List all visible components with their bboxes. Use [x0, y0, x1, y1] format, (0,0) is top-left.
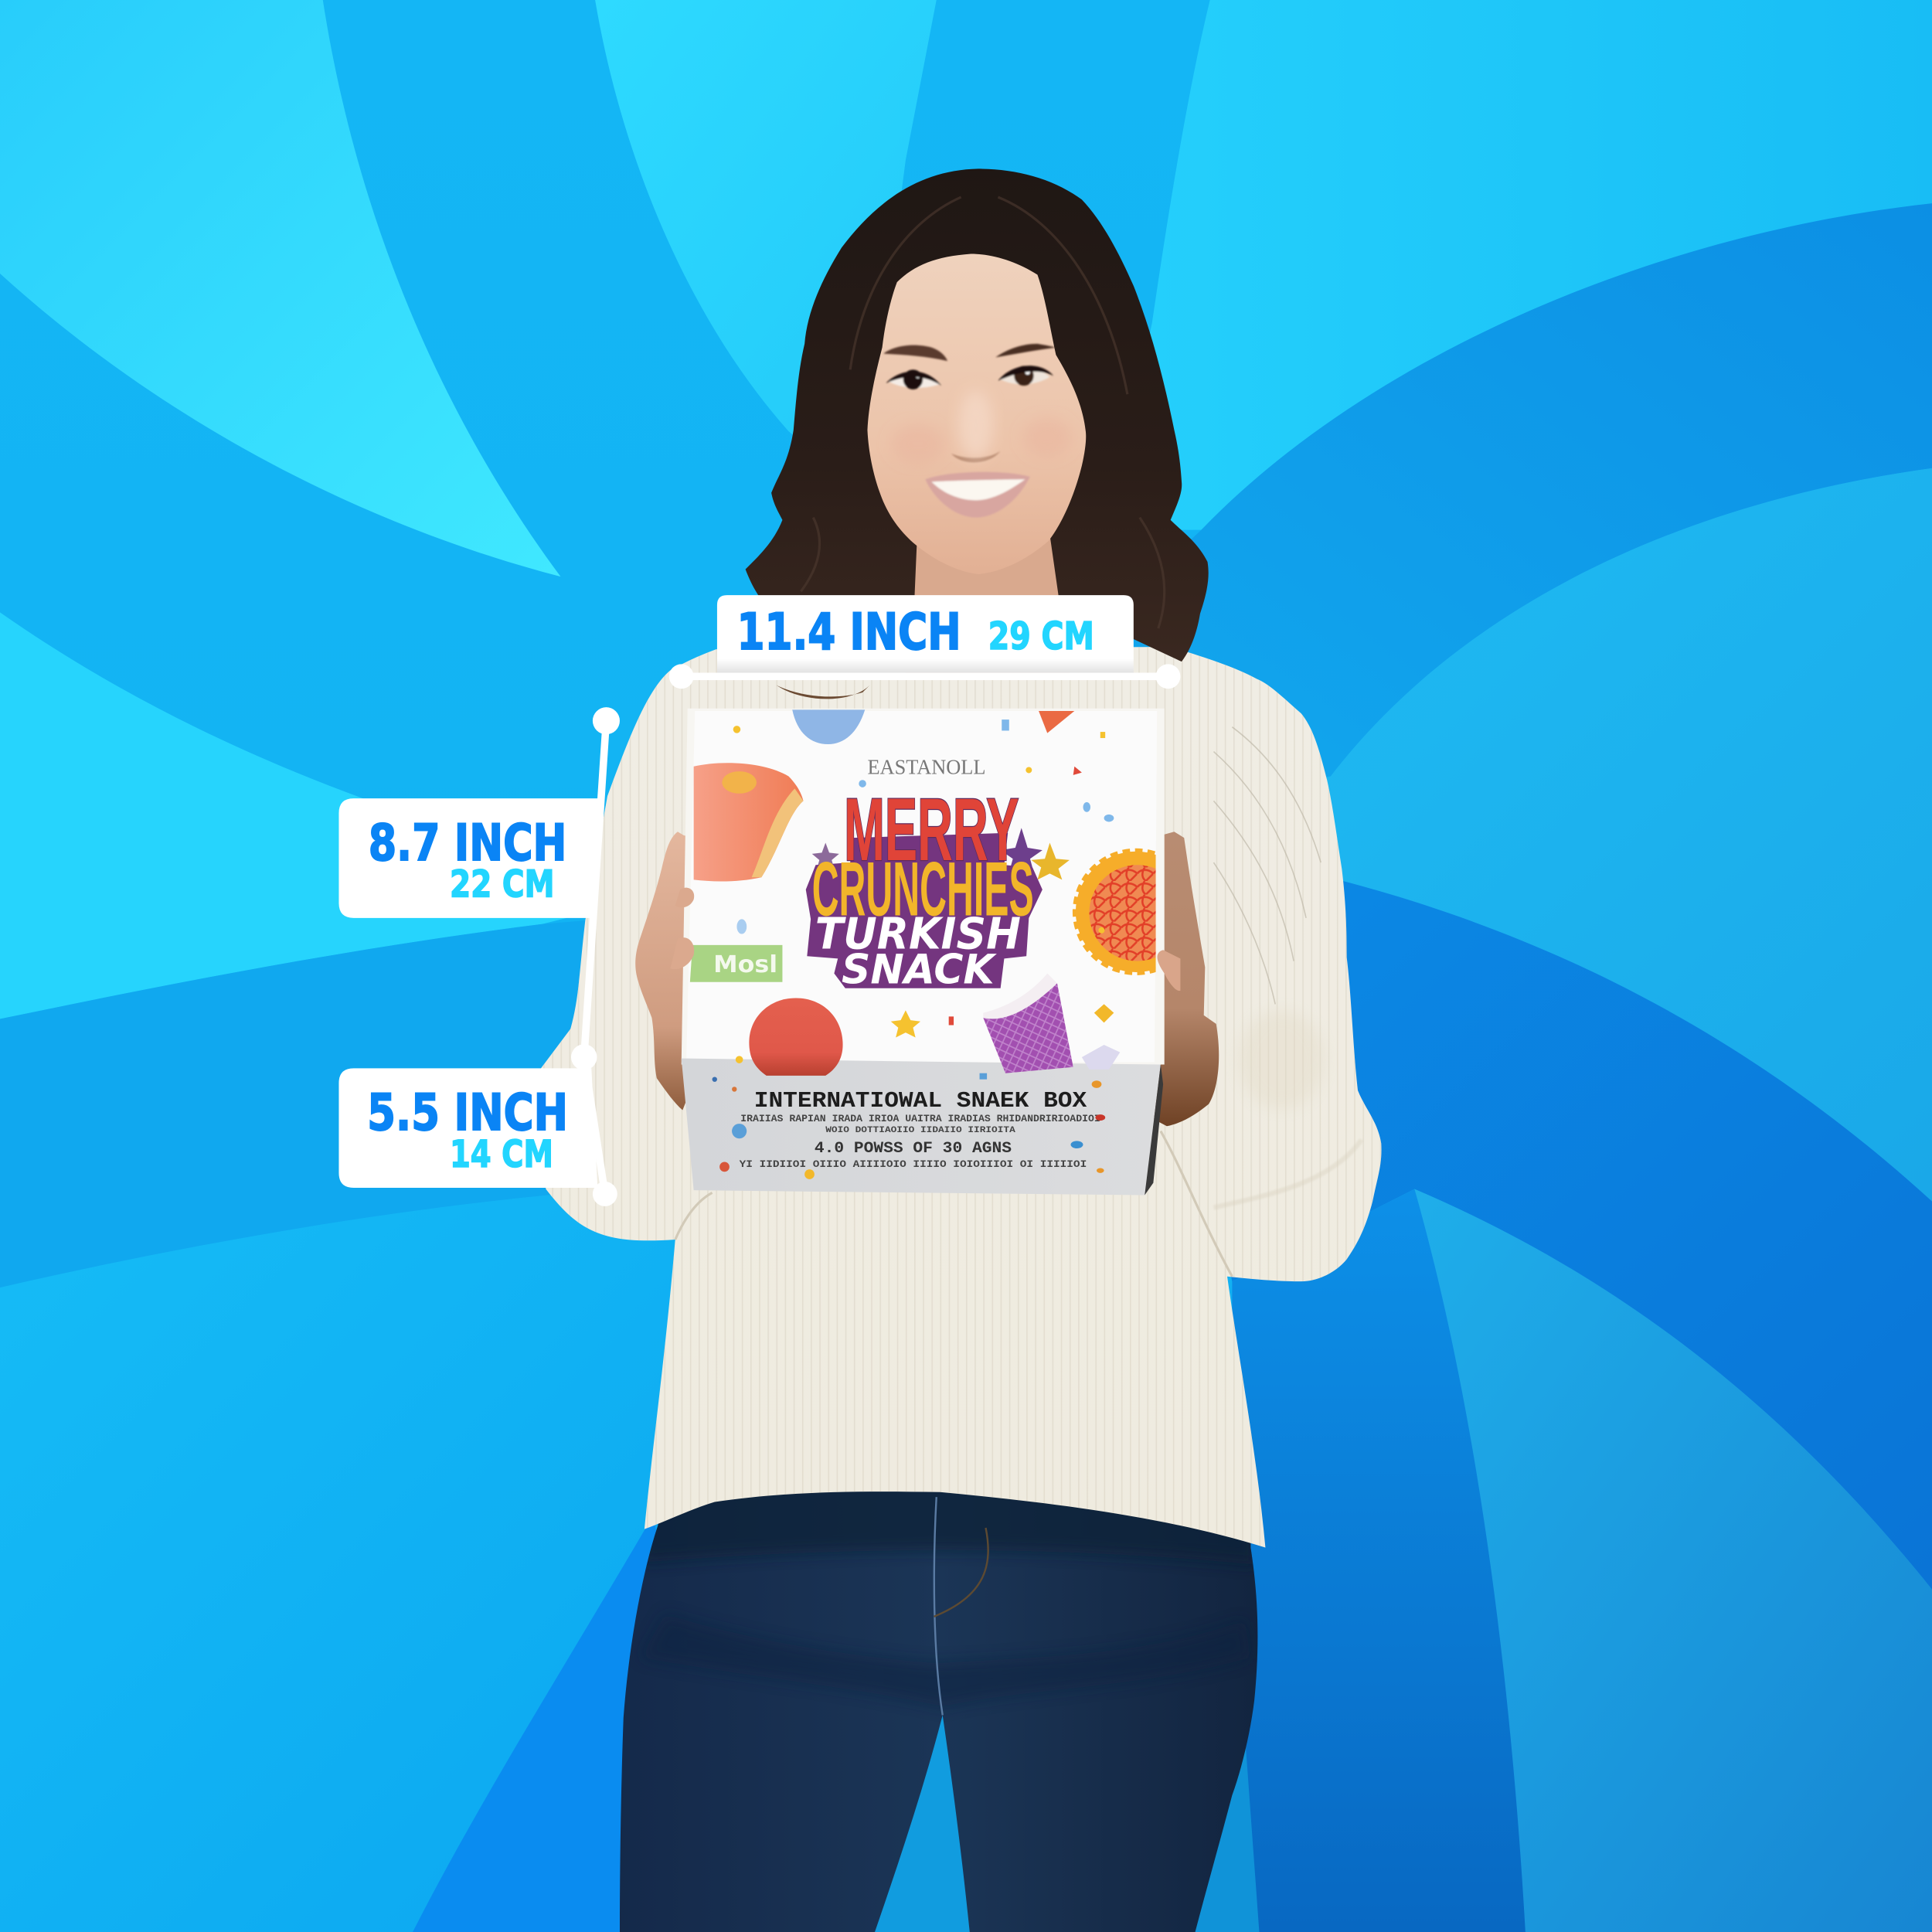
label: height 8.7 inch / 22 cm [338, 798, 597, 918]
person [530, 168, 1393, 1932]
title backdrop [806, 833, 1043, 988]
label: height 8.7 inch / 22 cm: 22 CM [450, 864, 554, 906]
right hand [1146, 832, 1219, 1126]
label: depth 5.5 inch / 14 cm: 5.5 INCH [367, 1083, 568, 1142]
face [867, 253, 1086, 574]
box title: SNACK: SNACK [842, 946, 998, 993]
box lower grey panel [682, 1059, 1163, 1196]
label: width 11.4 inch / 29 cm: 11.4 INCH [736, 603, 961, 662]
illustration: orange corner [1039, 711, 1074, 733]
dimension line: height and depth [571, 707, 620, 1206]
illustration: sugar cube [1082, 1045, 1120, 1070]
hair [746, 168, 1209, 662]
brand text: EASTANOLL [867, 755, 986, 778]
illustration: blue cookie [792, 709, 865, 744]
panel fine print 3: YI IIDIIOI OIIIO AIIIIOIO IIIIO IOIOIIIOI OI IIIIIOI [740, 1158, 1087, 1170]
box title: MERRY: MERRY [844, 781, 1019, 879]
smile [925, 472, 1030, 518]
label: depth 5.5 inch / 14 cm [338, 1068, 597, 1188]
jeans [610, 1460, 1269, 1932]
box title: TURKISH: TURKISH [815, 910, 1021, 960]
panel fine print 2: WOIO DOTTIAOIIO IIDAIIO IIRIOITA [825, 1126, 1015, 1135]
panel confetti [713, 1073, 1105, 1179]
snack box [682, 685, 1196, 1196]
snack box: CRUNCHIES [812, 847, 1034, 932]
sweater [530, 641, 1393, 1553]
illustration: red ball [749, 998, 843, 1076]
label: width 11.4 inch / 29 cm [717, 595, 1134, 673]
hair curl behind box [776, 685, 870, 699]
illustration: purple wafer cup [983, 974, 1073, 1073]
illustration: stars and confetti [733, 719, 1114, 1063]
illustration: round biscuit [1073, 849, 1156, 975]
green tag: Mosl: Mosl [713, 951, 777, 978]
panel heading: INTERNATIOWAL SNAEK BOX [754, 1088, 1087, 1114]
neck [906, 518, 1070, 675]
box front art panel [686, 711, 1157, 1062]
illustration: bitten orange cookie [694, 763, 804, 881]
panel subheading: 4.0 POWSS OF 30 AGNS [815, 1140, 1012, 1158]
left hand [635, 832, 702, 1111]
facial features [883, 344, 1072, 518]
label: height 8.7 inch / 22 cm: 8.7 INCH [369, 814, 566, 872]
dimension line: width [669, 664, 1180, 689]
label: width 11.4 inch / 29 cm: 29 CM [988, 614, 1094, 658]
fingers over box [670, 888, 1180, 991]
label: depth 5.5 inch / 14 cm: 14 CM [450, 1134, 553, 1176]
green tag: Mosl [690, 945, 782, 982]
panel fine print: IRAIIAS RAPIAN IRADA IRIOA UAITRA IRADIAS RHIDANDRIRIOADIOI [740, 1113, 1100, 1124]
box side strips [682, 709, 1165, 1065]
